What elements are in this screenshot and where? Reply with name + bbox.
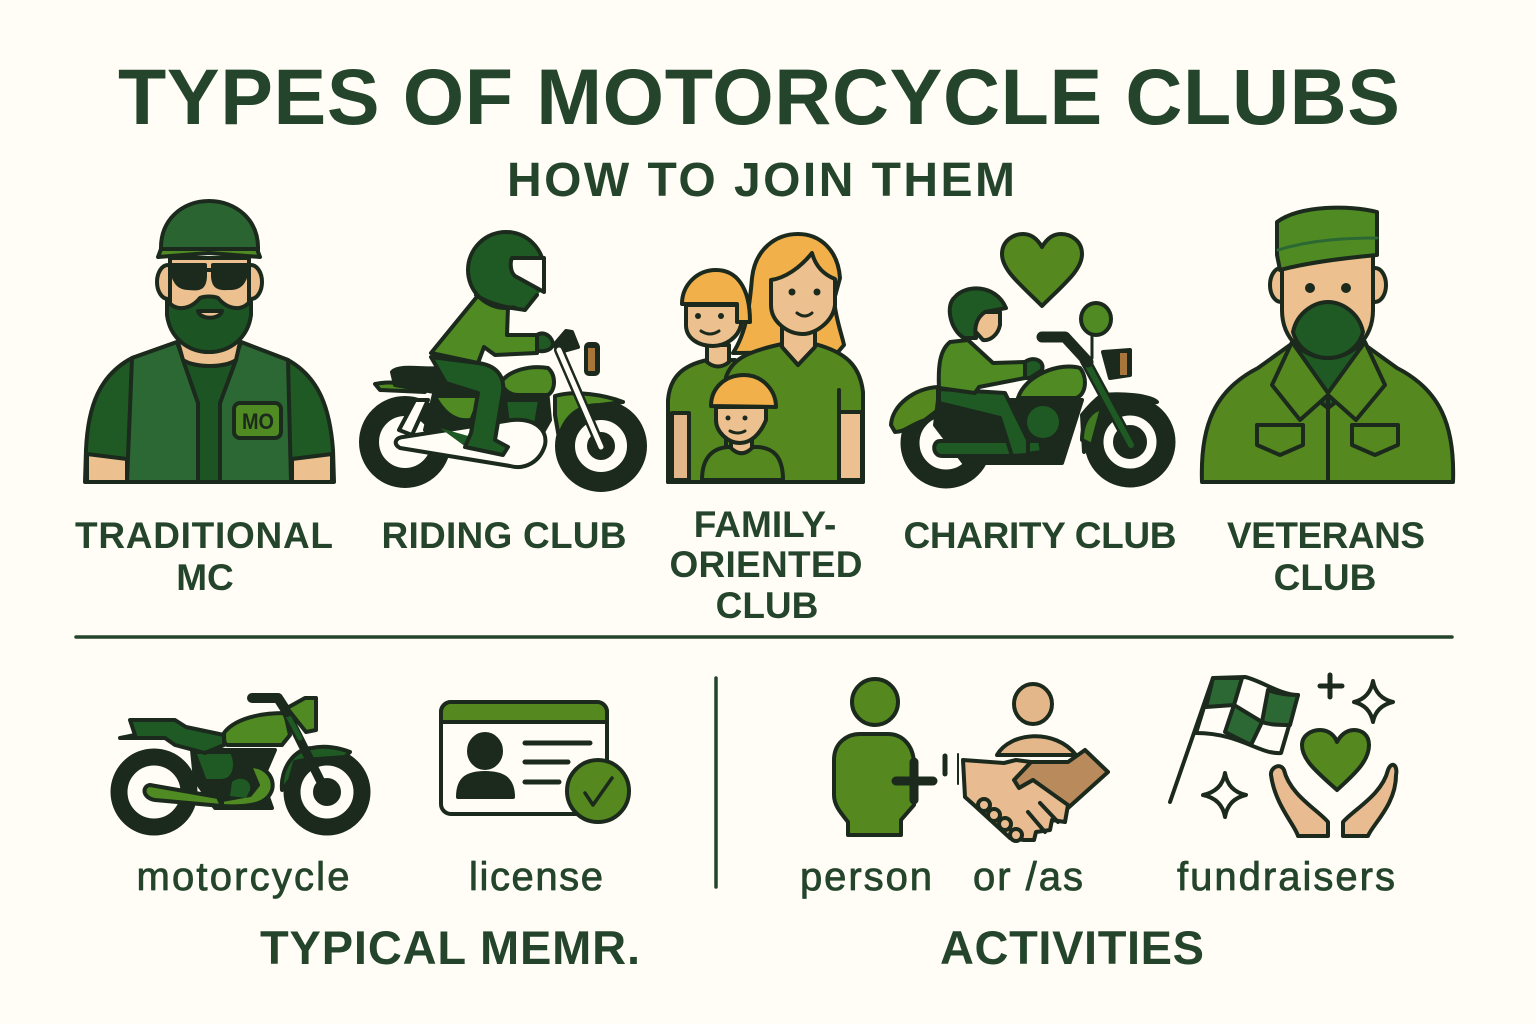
- label: fundraisers: fundraisers: [1177, 855, 1395, 899]
- label: family-oriented club: [670, 504, 862, 626]
- icon: license card: [441, 702, 629, 822]
- icon: charity club: [891, 234, 1166, 479]
- label: family-oriented club: ORIENTED: [670, 544, 862, 585]
- label: veterans club: VETERANS: [1227, 515, 1425, 556]
- heading: activities: ACTIVITIES: [940, 921, 1204, 974]
- icon: person and handshake: [834, 679, 1108, 841]
- label: family-oriented club: CLUB: [716, 585, 818, 626]
- label: person: person: [800, 855, 932, 899]
- heading: typical member: TYPICAL MEMR.: [260, 921, 640, 974]
- icon: traditional MC biker: [85, 201, 334, 482]
- label: traditional MC: [75, 515, 333, 598]
- label: or /as: or /as: [973, 855, 1083, 899]
- title: TYPES OF MOTORCYCLE CLUBS: [118, 52, 1400, 141]
- label: motorcycle: motorcycle: [136, 855, 350, 899]
- icon: veteran: [1202, 208, 1453, 482]
- icon: motorcycle: [119, 698, 362, 827]
- label: traditional MC: MC: [176, 557, 234, 598]
- label: veterans club: CLUB: [1274, 557, 1376, 598]
- label: traditional MC: TRADITIONAL: [75, 515, 333, 556]
- icon: MO badge text: MO: [242, 409, 274, 434]
- label: riding club: RIDING CLUB: [382, 515, 626, 556]
- label: veterans club: [1227, 515, 1425, 598]
- subtitle: HOW TO JOIN THEM: [507, 154, 1015, 207]
- label: family-oriented club: FAMILY-: [694, 504, 836, 545]
- label: license: license: [469, 855, 603, 899]
- icon: flag, hands and heart: [1170, 675, 1396, 836]
- icon: family: [668, 234, 863, 482]
- label: charity club: CHARITY CLUB: [904, 515, 1176, 556]
- icon: riding club: [369, 232, 637, 482]
